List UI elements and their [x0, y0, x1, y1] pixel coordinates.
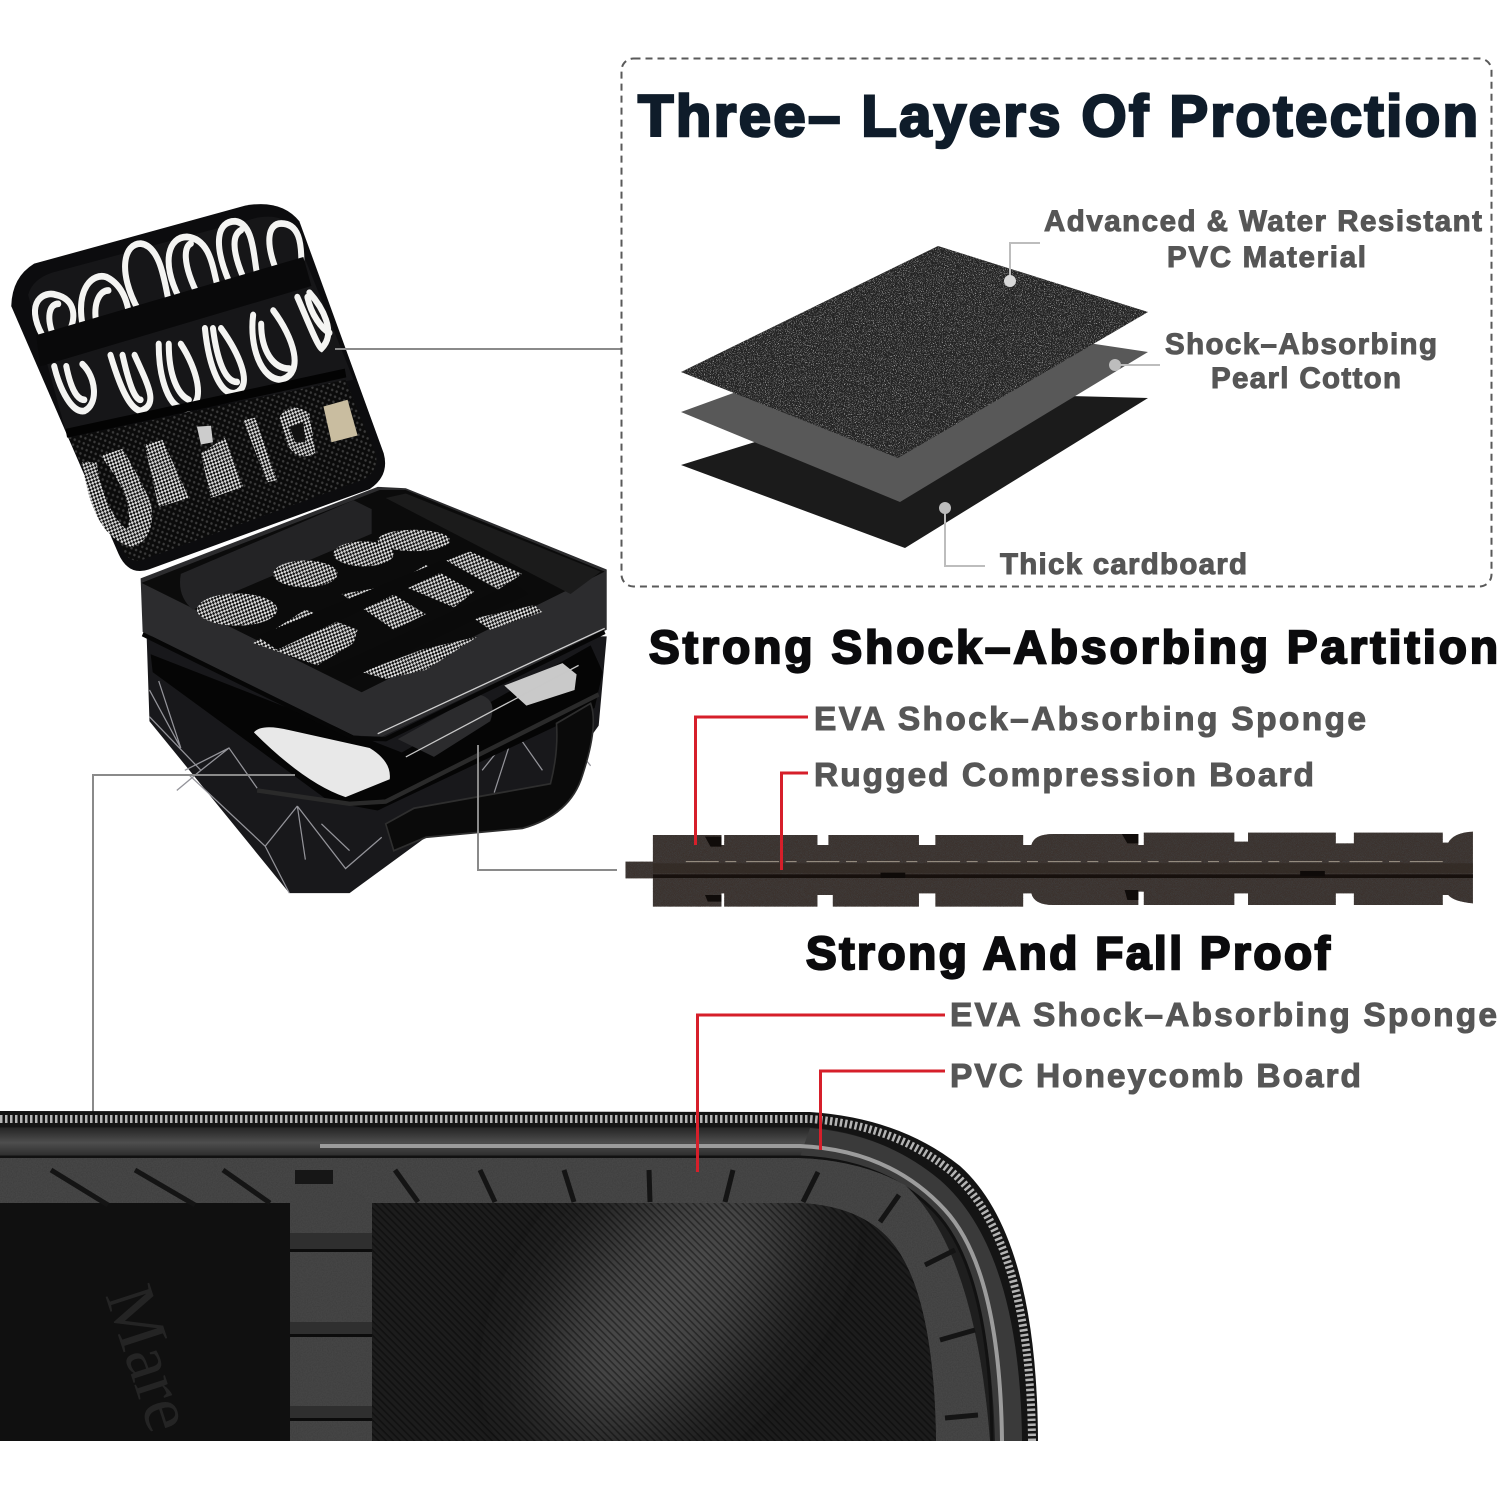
layer: pearl cotton	[681, 320, 1148, 502]
callout: pearl cotton: Pearl Cotton	[1211, 362, 1401, 395]
heading: strong and fall proof: Strong And Fall Proof	[806, 927, 1331, 979]
white mouse pouch	[254, 727, 390, 797]
open lid	[11, 204, 385, 571]
callout: EVA sponge on partition	[696, 701, 1366, 845]
callout: PVC honeycomb board: PVC Honeycomb Board	[950, 1058, 1361, 1095]
mesh pocket	[68, 380, 376, 561]
lining twill	[372, 1203, 936, 1441]
foam partition board	[625, 832, 1473, 907]
rim	[0, 1127, 1022, 1441]
tray interior	[141, 490, 605, 692]
callout: pearl cotton: Shock–Absorbing	[1165, 328, 1437, 361]
lid satin lining	[28, 217, 354, 433]
callout: PVC honeycomb board	[820, 1058, 1361, 1150]
photo: product bag open with cables	[11, 204, 607, 893]
leader line: partition to foam board	[478, 745, 617, 870]
callout: thick cardboard: Thick cardboard	[1000, 548, 1247, 581]
silver device	[504, 663, 577, 706]
central strip	[653, 863, 1473, 873]
callout: PVC: PVC Material	[1167, 241, 1366, 274]
lining highlight	[518, 1203, 822, 1441]
zipper	[0, 1111, 1038, 1441]
lining fabric	[372, 1203, 936, 1441]
elastic straps	[257, 561, 528, 681]
callout: EVA sponge on partition: EVA Shock–Absorbing Sponge	[814, 701, 1366, 738]
leader line: lid to layers panel	[335, 348, 621, 350]
lining left section	[0, 1203, 290, 1441]
pocket contents	[82, 400, 358, 547]
layer: thick cardboard	[681, 392, 1148, 548]
callout: PVC: Advanced & Water Resistant	[1044, 205, 1482, 238]
white cables lower	[54, 364, 94, 411]
elastic strap	[36, 257, 311, 366]
callout: pearl cotton	[1109, 328, 1437, 395]
callout: thick cardboard	[939, 502, 1247, 581]
panel: three layers of protection	[622, 58, 1492, 586]
foam slots	[51, 1170, 978, 1418]
back wall satin	[386, 494, 601, 594]
title: Three– Layers Of Protection	[638, 84, 1478, 149]
callout: EVA sponge on case wall: EVA Shock–Absorbing Sponge	[950, 997, 1497, 1034]
carrying handle	[386, 703, 593, 851]
leader line: wall to bottom photo	[93, 775, 295, 1130]
layer: PVC material	[681, 246, 1148, 458]
callout: EVA sponge on case wall	[698, 997, 1497, 1172]
lower compartment opening	[151, 645, 603, 810]
wireless charger	[398, 694, 492, 757]
lining logo text: Mare	[90, 1276, 209, 1440]
callout: PVC	[1004, 205, 1482, 287]
central partition	[290, 1170, 372, 1441]
bottom roll	[180, 500, 372, 610]
coiled braided cables	[197, 530, 542, 679]
callout: rugged compression board	[782, 757, 1314, 870]
foam band	[0, 1158, 990, 1441]
dashed frame	[622, 58, 1492, 586]
photo: case wall cross-section	[0, 1111, 1038, 1441]
lower compartment body	[147, 636, 607, 893]
foam body	[625, 832, 1473, 907]
zip edge	[257, 694, 599, 804]
heading: strong shock-absorbing partition: Strong Shock–Absorbing Partition	[649, 621, 1498, 673]
white cables upper	[35, 221, 329, 411]
callout: rugged compression board: Rugged Compression Board	[814, 757, 1314, 794]
dark gap	[0, 1157, 992, 1441]
rim highlight	[320, 1146, 1002, 1441]
upper tray	[141, 487, 607, 739]
pocket binding	[66, 373, 346, 433]
